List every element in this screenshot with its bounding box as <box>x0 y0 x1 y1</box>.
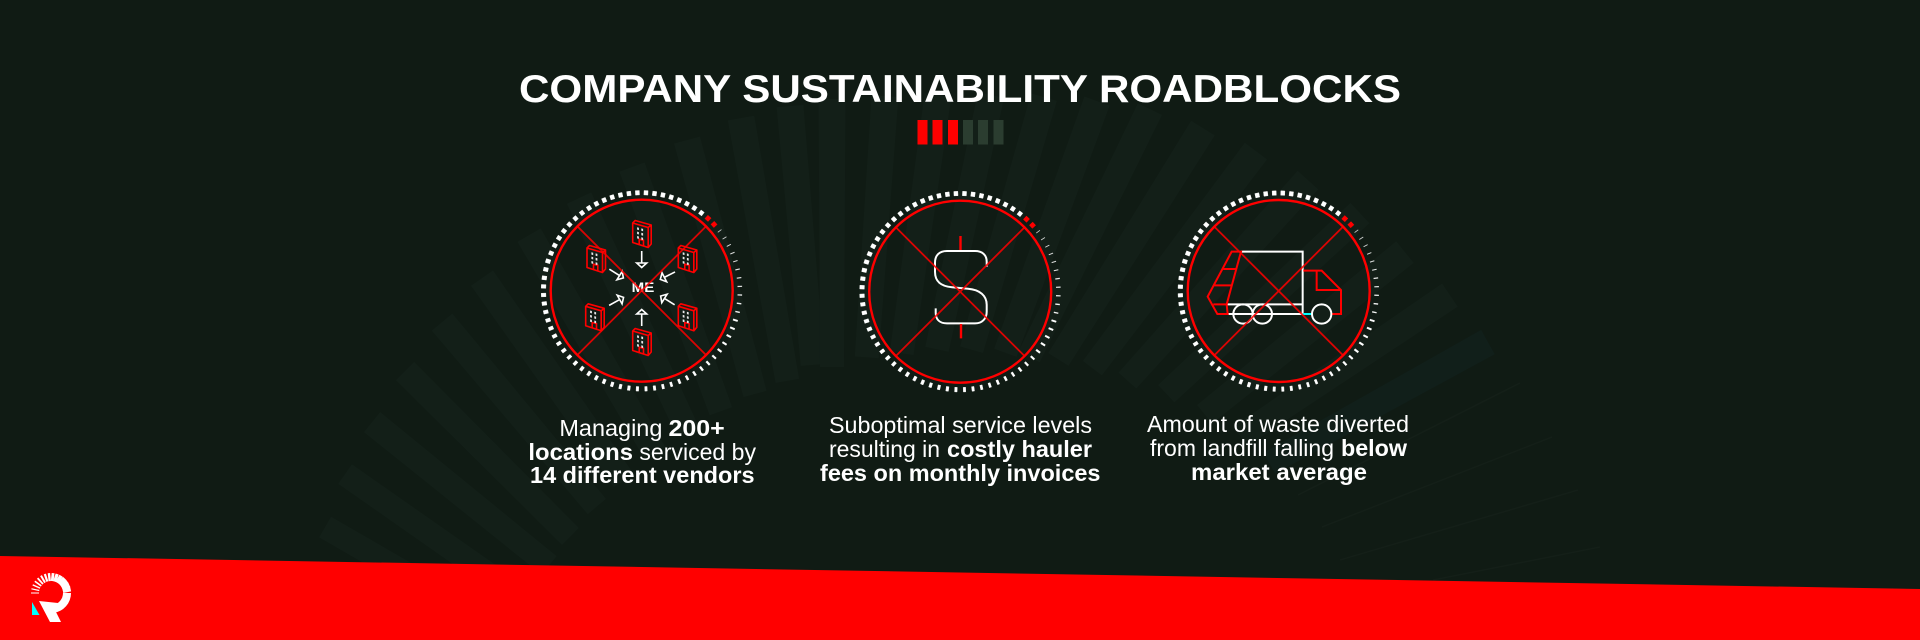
background radial rays <box>319 92 1495 640</box>
icon: buildings and arrows pointing to ME <box>586 220 697 356</box>
caption: below <box>1341 435 1407 461</box>
red footer band <box>0 556 1920 640</box>
caption: serviced by <box>639 439 756 465</box>
red crossed circle <box>869 201 1051 383</box>
caption <box>1147 411 1409 485</box>
caption: market average <box>1191 459 1367 485</box>
caption: resulting in <box>829 436 940 462</box>
caption: 14 different vendors <box>530 462 755 488</box>
logo <box>31 573 71 622</box>
caption: costly hauler <box>947 436 1092 462</box>
title: COMPANY SUSTAINABILITY ROADBLOCKS <box>519 68 1401 111</box>
panel: managing vendors <box>528 191 756 488</box>
icon: garbage truck <box>1208 252 1341 324</box>
caption: Amount of waste diverted <box>1147 411 1409 437</box>
caption: fees on monthly invoices <box>820 460 1100 486</box>
red crossed circle <box>1188 200 1370 382</box>
caption: from landfill falling <box>1150 435 1334 461</box>
tick ring <box>1178 191 1379 391</box>
progress bars <box>918 120 1004 144</box>
logo: white R <box>31 573 71 622</box>
caption: Managing <box>559 415 662 441</box>
tick ring <box>541 191 742 391</box>
caption: locations <box>528 439 633 465</box>
caption: Suboptimal service levels <box>829 412 1092 438</box>
icon: dollar sign <box>935 236 987 338</box>
caption <box>820 412 1100 486</box>
icon: buildings and arrows pointing to ME: ME <box>632 279 654 295</box>
panel: waste diversion <box>1147 191 1409 485</box>
caption: 200+ <box>668 415 725 441</box>
tick ring <box>860 191 1061 392</box>
logo: cyan triangle <box>32 602 40 615</box>
red crossed circle <box>551 200 733 382</box>
background thin rays <box>1298 383 1600 580</box>
panel: hauler fees <box>820 191 1100 486</box>
caption <box>528 415 756 488</box>
